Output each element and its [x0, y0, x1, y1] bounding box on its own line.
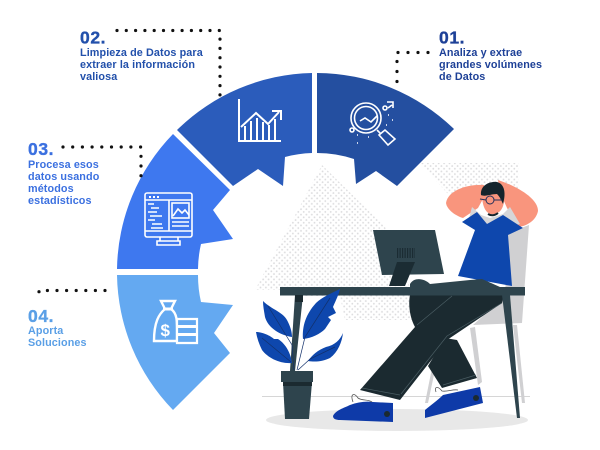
text block 03: datos usando: [28, 171, 100, 183]
illustration: person: [446, 180, 538, 286]
dotted connector 02: [117, 30, 220, 96]
text block 03: métodos: [28, 183, 74, 195]
illustration: desk: [280, 287, 525, 418]
illustration: chair: [425, 225, 529, 403]
text block 04: Aporta: [28, 325, 64, 337]
head: [482, 186, 504, 214]
illustration: shoes: [333, 387, 483, 422]
icon: magnifier analysis: [350, 102, 395, 145]
text block 02: 02.: [80, 28, 106, 48]
illustration: plant: [256, 289, 343, 419]
text block 02: valiosa: [80, 71, 118, 83]
floor shadow: [266, 409, 528, 431]
text block 01: [439, 28, 542, 83]
floor line: [262, 396, 530, 397]
text block 02: extraer la información: [80, 59, 195, 71]
text block 01: grandes volúmenes: [439, 59, 542, 71]
text block 02: [80, 28, 204, 83]
segment 03: [117, 134, 233, 269]
text block 01: de Datos: [439, 71, 485, 83]
segment 02: [177, 73, 312, 186]
text block 03: 03.: [28, 139, 54, 159]
text block 03: Procesa esos: [28, 159, 99, 171]
halftone backdrop top right: [420, 163, 519, 200]
illustration: front leg: [360, 295, 504, 400]
dotted connector 03: [63, 147, 141, 176]
dotted connector 01: [397, 52, 428, 90]
text block 04: [28, 306, 87, 349]
icon: line chart: [239, 99, 281, 141]
text block 01: 01.: [439, 28, 465, 48]
text block 02: Limpieza de Datos para: [80, 47, 204, 59]
segment 04: [117, 275, 233, 410]
segment 01: [317, 73, 454, 186]
icon: money bag and coins: [154, 301, 197, 343]
icon: dashboard monitor: [145, 193, 192, 245]
glasses: [480, 196, 502, 204]
arms: [446, 185, 484, 218]
illustration: back leg: [428, 338, 477, 388]
text block 04: Soluciones: [28, 337, 87, 349]
text block 01: Analiza y extrae: [439, 47, 522, 59]
icon: money bag and coins: $: [160, 321, 170, 340]
text block 03: [28, 139, 100, 207]
halftone backdrop triangle: [255, 165, 412, 320]
illustration: monitor: [373, 230, 444, 286]
text block 03: estadísticos: [28, 195, 92, 207]
collar: [468, 207, 520, 232]
shirt: [458, 212, 523, 286]
illustration: keyboard and mouse: [410, 279, 500, 287]
text block 04: 04.: [28, 306, 54, 326]
dotted connector 04: [39, 290, 105, 301]
